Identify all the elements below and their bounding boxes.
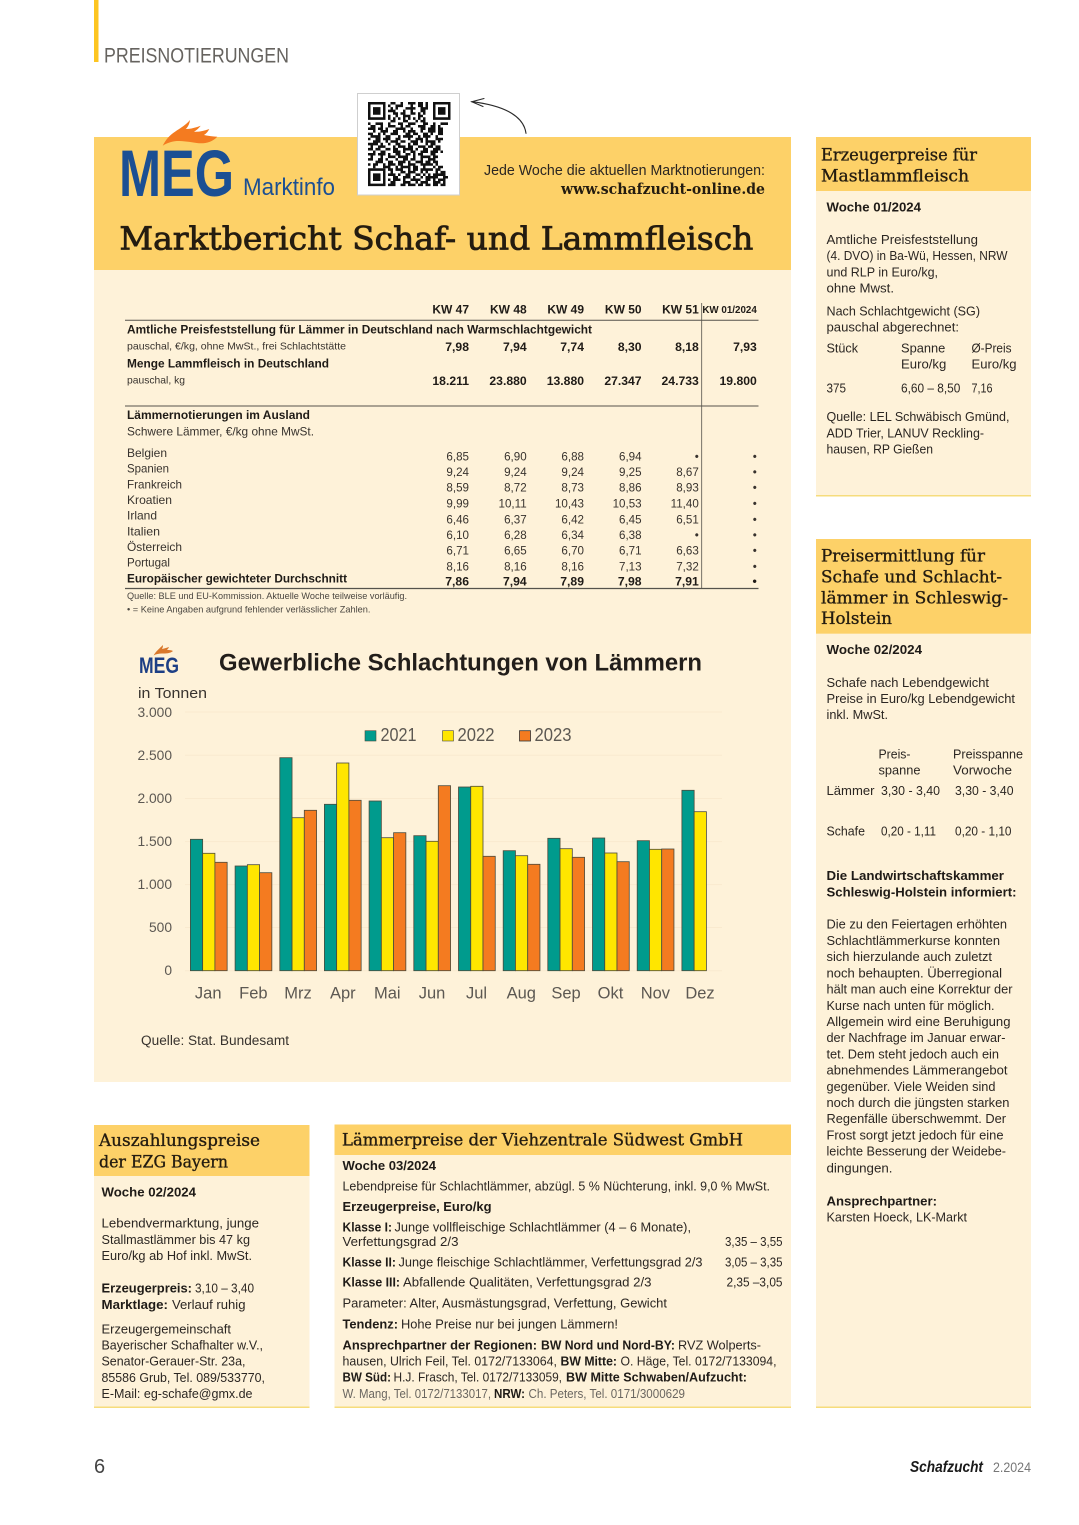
regional contacts: BW Mitte Schwaben/Aufzucht: — [566, 1370, 747, 1385]
foreign quotations rows: 6,34 — [561, 529, 585, 542]
foreign quotations rows: 7,32 — [676, 560, 699, 573]
panel heading — [334, 1124, 791, 1155]
bars 2023 — [215, 786, 674, 971]
market commentary: Regenfälle überschwemmt. Der — [826, 1111, 1007, 1126]
month labels: Jun — [419, 984, 445, 1002]
regional contacts: BW Süd: — [342, 1370, 391, 1385]
panel text: ohne Mwst. — [826, 281, 894, 296]
German price row: 7,94 — [503, 340, 527, 354]
foreign quotations rows: 9,24 — [504, 466, 527, 479]
legend — [365, 725, 572, 745]
magazine footer: Schafzucht — [910, 1459, 984, 1476]
price table: Ø-Preis — [972, 340, 1012, 355]
foreign quotations rows: 11,40 — [671, 497, 699, 510]
panel intro — [826, 642, 1015, 722]
price table: Vorwoche — [953, 762, 1012, 778]
foreign quotations rows: 8,72 — [504, 482, 527, 495]
regional contacts: Ansprechpartner der Regionen: — [342, 1337, 537, 1352]
price table: Euro/kg — [901, 356, 946, 372]
regional contacts: RVZ Wolperts- — [678, 1337, 761, 1352]
panel: Auszahlungspreise EZG Bayern — [94, 1125, 310, 1408]
bar chart: commercial lamb slaughter — [137, 645, 722, 1048]
foreign quotations rows: 8,93 — [676, 482, 699, 495]
foreign quotations rows: 6,65 — [504, 545, 527, 558]
regional contacts: H.J. Frasch, Tel. 0172/7133059, — [394, 1370, 562, 1385]
German price row — [127, 322, 757, 354]
table: price overview — [125, 302, 758, 616]
chart title: Gewerbliche Schlachtungen von Lämmern — [219, 650, 702, 677]
source note — [826, 409, 1010, 456]
price table: Stück — [826, 340, 858, 355]
market commentary: tet. Dem steht jedoch auch ein — [826, 1046, 999, 1061]
panel text: Nach Schlachtgewicht (SG) — [826, 303, 980, 318]
market commentary: sich hierzulande auch zuletzt — [826, 949, 992, 964]
month labels: Feb — [239, 984, 268, 1002]
foreign quotations rows: 10,53 — [613, 497, 642, 510]
foreign quotations rows: 6,42 — [561, 513, 584, 526]
foreign quotations rows: • — [753, 497, 757, 510]
panel heading: Auszahlungspreise — [98, 1131, 260, 1150]
panel: Preisermittlung Schleswig-Holstein — [816, 539, 1031, 1408]
foreign quotations rows: 6,63 — [676, 545, 699, 558]
foreign quotations rows: 6,51 — [676, 513, 699, 526]
panel intro: Woche 02/2024 — [826, 642, 923, 657]
foreign quotations rows: Spanien — [127, 462, 169, 476]
table header: KW 48 — [490, 302, 527, 316]
panel text: 85586 Grub, Tel. 089/533770, — [102, 1370, 265, 1385]
market commentary: Schlachtlämmerkurse konnten — [826, 933, 1000, 948]
German quantity row: 24.733 — [662, 374, 699, 388]
grid lines and y axis: 1.000 — [137, 877, 172, 892]
price classes: Klasse II: — [342, 1255, 396, 1270]
price classes: Woche 03/2024 — [342, 1158, 437, 1173]
price classes: Verfettungsgrad 2/3 — [342, 1234, 458, 1249]
price classes: Tendenz: — [342, 1316, 398, 1332]
month labels: Apr — [330, 984, 356, 1002]
price classes: Hohe Preise nur bei jungen Lämmern! — [401, 1316, 618, 1332]
foreign quotations rows: 7,13 — [619, 560, 642, 573]
German price row: Amtliche Preisfeststellung für Lämmer in Deutschland nach Warmschlachtgewicht — [127, 322, 592, 336]
foreign quotations rows: Irland — [127, 509, 157, 523]
foreign quotations rows: 6,90 — [504, 451, 527, 464]
month labels: Aug — [507, 984, 536, 1002]
foreign quotations rows: 6,37 — [504, 513, 527, 526]
month labels: Jan — [195, 984, 222, 1002]
month labels: Sep — [551, 984, 581, 1002]
panel heading — [816, 137, 1031, 191]
price table: 3,30 - 3,40 — [955, 783, 1014, 798]
foreign quotations rows: 10,11 — [499, 497, 527, 510]
market commentary — [826, 868, 1016, 1175]
regional contacts — [342, 1337, 776, 1401]
table header: KW 47 — [432, 302, 469, 316]
panel text: und RLP in Euro/kg, — [826, 264, 938, 280]
source note: ADD Trier, LANUV Reckling- — [826, 425, 984, 440]
panel heading: Mastlammfleisch — [821, 167, 969, 186]
legend: 2021 — [380, 725, 416, 745]
price classes: 2,35 –3,05 — [726, 1275, 782, 1290]
grid lines and y axis: 3.000 — [137, 705, 172, 720]
market commentary: Die zu den Feiertagen erhöhten — [826, 917, 1007, 932]
foreign quotations rows — [127, 446, 757, 589]
magazine footer: 2.2024 — [993, 1459, 1031, 1475]
table footnotes: Quelle: BLE und EU-Kommission. Aktuelle Woche teilweise vorläufig. — [127, 591, 407, 602]
source note: hausen, RP Gießen — [826, 442, 933, 456]
magazine footer — [910, 1459, 1031, 1476]
price classes: Junge vollfleischige Schlachtlämmer (4 – 6 Monate), — [394, 1220, 691, 1235]
regional contacts: BW Mitte: — [560, 1354, 617, 1369]
foreign quotations rows: 9,99 — [446, 497, 469, 510]
contact: Karsten Hoeck, LK-Markt — [826, 1210, 967, 1224]
web notice: www.schafzucht-online.de — [560, 180, 765, 198]
panel heading: Preisermittlung für — [821, 547, 985, 566]
market commentary: gegenüber. Viele Weiden sind — [826, 1079, 996, 1094]
section marker — [94, 0, 289, 68]
foreign quotations rows: 6,88 — [561, 451, 584, 464]
price table: 3,30 - 3,40 — [881, 783, 940, 798]
price classes: Junge fleischige Schlachtlämmer, Verfettungsgrad 2/3 — [398, 1255, 702, 1270]
German quantity row: 13.880 — [547, 374, 584, 388]
header band — [94, 120, 791, 270]
panel text: (4. DVO) in Ba-Wü, Hessen, NRW — [826, 248, 1008, 263]
arrow to QR code — [472, 98, 526, 133]
icon: small MEG logo: MEG — [139, 653, 179, 678]
grid lines and y axis: 1.500 — [137, 834, 172, 849]
price table: 375 — [826, 380, 846, 395]
table footnotes — [127, 591, 407, 616]
contact: Ansprechpartner: — [826, 1194, 937, 1208]
table footnotes: • = Keine Angaben aufgrund fehlender verlässlicher Zahlen. — [127, 605, 370, 616]
price classes: Klasse I: — [342, 1220, 392, 1235]
market commentary: leichte Besserung der Weidebe- — [826, 1144, 1006, 1159]
foreign quotations rows: 8,67 — [676, 466, 699, 479]
table header: KW 49 — [547, 302, 584, 316]
month labels: Mrz — [284, 984, 312, 1002]
panel heading: Lämmerpreise der Viehzentrale Südwest GmbH — [342, 1131, 743, 1150]
table header: KW 50 — [605, 302, 642, 316]
German quantity row — [127, 357, 757, 388]
panel text: Euro/kg ab Hof inkl. MwSt. — [102, 1248, 252, 1263]
grid lines and y axis: 0 — [164, 963, 172, 978]
foreign quotations rows: 6,71 — [619, 545, 642, 558]
month labels: Nov — [641, 984, 671, 1002]
price classes: Parameter: Alter, Ausmästungsgrad, Verfettung, Gewicht — [342, 1295, 667, 1310]
foreign quotations rows: Kroatien — [127, 493, 172, 507]
panel text: 3,10 – 3,40 — [195, 1281, 254, 1296]
regional contacts: hausen, Ulrich Feil, Tel. 0172/7133064, — [342, 1354, 557, 1369]
price table: 6,60 – 8,50 — [901, 380, 960, 395]
price classes: Abfallende Qualitäten, Verfettungsgrad 2/3 — [403, 1275, 652, 1290]
German quantity row: 19.800 — [720, 374, 757, 388]
foreign quotations rows: 6,70 — [561, 545, 584, 558]
market commentary: Kurse nach unten für möglich. — [826, 998, 994, 1013]
table header: KW 01/2024 — [702, 305, 757, 316]
panel text: Bayerischer Schafhalter w.V., — [102, 1338, 263, 1352]
panel intro: Preise in Euro/kg Lebendgewicht — [826, 691, 1015, 706]
market commentary: Die Landwirtschaftskammer — [826, 868, 1004, 883]
foreign quotations rows: 9,24 — [561, 466, 585, 479]
panel text: Senator-Gerauer-Str. 23a, — [102, 1354, 246, 1369]
foreign quotations rows: 8,59 — [446, 482, 469, 495]
foreign quotations rows: • — [753, 575, 757, 589]
price table: Spanne — [901, 340, 945, 355]
icon: QR code — [358, 94, 460, 195]
foreign quotations rows: 6,38 — [619, 529, 642, 542]
regional contacts: O. Häge, Tel. 0172/7133094, — [620, 1354, 776, 1369]
grid lines and y axis — [137, 705, 722, 978]
price table: 0,20 - 1,10 — [955, 823, 1012, 838]
price table — [826, 746, 1023, 838]
foreign quotations rows: 7,89 — [560, 575, 584, 589]
market commentary: der Nachfrage im Januar erwar- — [826, 1030, 1006, 1045]
panel: MEG market report — [94, 94, 791, 1082]
German price row: 7,93 — [733, 340, 757, 354]
foreign quotations rows: • — [753, 451, 757, 464]
foreign quotations rows: 8,16 — [504, 560, 527, 573]
price table: Lämmer — [826, 783, 875, 798]
panel heading: Schafe und Schlacht- — [821, 567, 1002, 586]
title: Marktbericht Schaf- und Lammfleisch — [119, 219, 753, 257]
panel intro: Schafe nach Lebendgewicht — [826, 675, 989, 690]
foreign quotations rows: 6,10 — [446, 529, 469, 542]
foreign quotations rows: • — [753, 513, 757, 526]
foreign quotations rows: Europäischer gewichteter Durchschnitt — [127, 571, 347, 585]
German quantity row: pauschal, kg — [127, 375, 185, 387]
German quantity row: 27.347 — [604, 374, 642, 388]
panel text: Stallmastlämmer bis 47 kg — [102, 1232, 250, 1247]
table header: KW 51 — [662, 302, 699, 316]
German price row: 8,18 — [675, 340, 699, 354]
panel text: pauschal abgerechnet: — [826, 320, 959, 335]
source note: Quelle: LEL Schwäbisch Gmünd, — [826, 409, 1010, 424]
panel heading — [94, 1125, 310, 1176]
panel text — [102, 1185, 265, 1401]
German price row: 8,30 — [618, 340, 642, 354]
German quantity row: Menge Lammfleisch in Deutschland — [127, 357, 329, 371]
foreign quotations rows: • — [753, 482, 757, 495]
foreign quotations rows: Frankreich — [127, 477, 182, 491]
axis unit: in Tonnen — [138, 685, 207, 702]
page number: 6 — [94, 1456, 105, 1478]
foreign quotations rows: • — [695, 451, 699, 464]
icon: small MEG logo — [139, 645, 179, 678]
legend: 2022 — [458, 725, 494, 745]
panel heading: Erzeugerpreise für — [821, 146, 977, 165]
foreign quotations rows: 6,45 — [619, 513, 642, 526]
table header — [432, 302, 757, 316]
German price row: pauschal, €/kg, ohne MwSt., frei Schlachtstätte — [127, 340, 346, 352]
panel text: Marktlage: — [102, 1297, 168, 1312]
web notice — [484, 163, 765, 198]
regional contacts: BW Nord und Nord-BY: — [541, 1337, 675, 1352]
panel text: E-Mail: eg-schafe@gmx.de — [102, 1386, 252, 1401]
market commentary: noch durch die jüngsten starken — [826, 1095, 1010, 1110]
market commentary: Schleswig-Holstein informiert: — [826, 885, 1016, 900]
legend: 2023 — [534, 725, 572, 745]
panel: Erzeugerpreise für Mastlammfleisch — [816, 137, 1031, 496]
foreign quotations rows: 10,43 — [555, 497, 584, 510]
foreign quotations rows: 8,73 — [561, 482, 584, 495]
price table: 7,16 — [972, 380, 992, 395]
foreign quotations rows: 9,25 — [619, 466, 642, 479]
German price row: 7,74 — [560, 340, 584, 354]
bars 2021 — [190, 758, 694, 971]
price table — [826, 340, 1016, 395]
foreign quotations rows: 6,46 — [446, 513, 469, 526]
price table: Schafe — [826, 823, 865, 838]
foreign quotations heading: Lämmernotierungen im Ausland — [127, 408, 310, 422]
price classes: Klasse III: — [342, 1275, 400, 1290]
month labels: Jul — [466, 984, 487, 1002]
panel text: Erzeugergemeinschaft — [102, 1321, 231, 1336]
grid lines and y axis: 500 — [149, 920, 172, 935]
foreign quotations rows: • — [753, 545, 757, 558]
month labels: Okt — [598, 984, 624, 1002]
icon: MEG Marktinfo logo: MEG — [119, 136, 234, 210]
icon: MEG Marktinfo logo: Marktinfo — [243, 174, 335, 201]
price classes: Erzeugerpreise, Euro/kg — [342, 1199, 492, 1214]
price classes — [342, 1158, 782, 1332]
price classes: 3,35 – 3,55 — [725, 1234, 782, 1249]
chart source: Quelle: Stat. Bundesamt — [141, 1033, 289, 1048]
foreign quotations heading: Schwere Lämmer, €/kg ohne MwSt. — [127, 425, 314, 439]
icon: MEG Marktinfo logo — [119, 120, 335, 210]
panel heading — [816, 539, 1031, 634]
month labels: Dez — [685, 984, 715, 1002]
foreign quotations heading — [127, 408, 314, 439]
market commentary: Frost sorgt jetzt jedoch für eine — [826, 1127, 1004, 1142]
foreign quotations rows: Portugal — [127, 556, 170, 570]
foreign quotations rows: 6,94 — [619, 451, 642, 464]
panel: Lämmerpreise Viehzentrale Südwest — [334, 1124, 791, 1408]
panel text: Woche 01/2024 — [826, 200, 922, 215]
foreign quotations rows: 7,86 — [445, 575, 469, 589]
panel text: Erzeugerpreis: — [102, 1281, 192, 1296]
foreign quotations rows: • — [753, 560, 757, 573]
panel heading: der EZG Bayern — [99, 1152, 228, 1171]
foreign quotations rows: 9,24 — [446, 466, 470, 479]
foreign quotations rows: 8,16 — [561, 560, 584, 573]
foreign quotations rows: Italien — [127, 524, 160, 538]
panel intro: inkl. MwSt. — [826, 707, 888, 722]
price classes: 3,05 – 3,35 — [725, 1255, 782, 1270]
price classes: Lebendpreise für Schlachtlämmer, abzügl. 5 % Nüchterung, inkl. 9,0 % MwSt. — [342, 1179, 770, 1194]
German price row: 7,98 — [445, 340, 469, 354]
panel text: Lebendvermarktung, junge — [102, 1216, 259, 1231]
month labels — [195, 984, 715, 1002]
panel text: Amtliche Preisfeststellung — [826, 232, 978, 247]
market commentary: dingungen. — [826, 1160, 892, 1175]
foreign quotations rows: Österreich — [127, 540, 182, 554]
foreign quotations rows: 7,98 — [618, 575, 642, 589]
panel text — [826, 200, 1008, 335]
German quantity row: 18.211 — [432, 374, 469, 388]
market commentary: noch behaupten. Überregional — [826, 966, 1002, 980]
regional contacts: NRW: — [494, 1386, 525, 1401]
foreign quotations rows: 6,85 — [446, 451, 469, 464]
bars 2022 — [203, 763, 706, 971]
price table: 0,20 - 1,11 — [881, 823, 936, 838]
grid lines and y axis: 2.500 — [137, 748, 172, 763]
foreign quotations rows: 8,16 — [446, 560, 469, 573]
price table: spanne — [878, 762, 920, 778]
foreign quotations rows: 7,91 — [675, 575, 699, 589]
foreign quotations rows: 8,86 — [619, 482, 642, 495]
grid lines and y axis: 2.000 — [137, 791, 172, 806]
market commentary: hält man auch eine Korrektur der — [826, 982, 1013, 997]
regional contacts: W. Mang, Tel. 0172/7133017, — [342, 1386, 491, 1401]
market commentary: Allgemein wird eine Beruhigung — [826, 1014, 1010, 1029]
price table: Preis- — [878, 746, 910, 761]
foreign quotations rows: 7,94 — [503, 575, 527, 589]
panel heading: Holstein — [821, 609, 892, 628]
panel text: Woche 02/2024 — [102, 1185, 197, 1200]
foreign quotations rows: • — [695, 529, 699, 542]
German quantity row: 23.880 — [489, 374, 527, 388]
regional contacts: Ch. Peters, Tel. 0171/3000629 — [528, 1386, 685, 1401]
price table: Preisspanne — [953, 746, 1023, 761]
contact — [826, 1194, 967, 1224]
section marker: PREISNOTIERUNGEN — [104, 44, 289, 68]
market commentary: abnehmendes Lämmerangebot — [826, 1063, 1008, 1078]
foreign quotations rows: • — [753, 466, 757, 479]
foreign quotations rows: 6,28 — [504, 529, 527, 542]
web notice: Jede Woche die aktuellen Marktnotierungen: — [484, 163, 765, 179]
panel heading: lämmer in Schleswig- — [821, 588, 1008, 607]
foreign quotations rows: • — [753, 529, 757, 542]
foreign quotations rows: Belgien — [127, 446, 167, 460]
panel text: Verlauf ruhig — [172, 1297, 246, 1312]
price table: Euro/kg — [972, 356, 1016, 372]
month labels: Mai — [374, 984, 401, 1002]
foreign quotations rows: 6,71 — [446, 545, 469, 558]
